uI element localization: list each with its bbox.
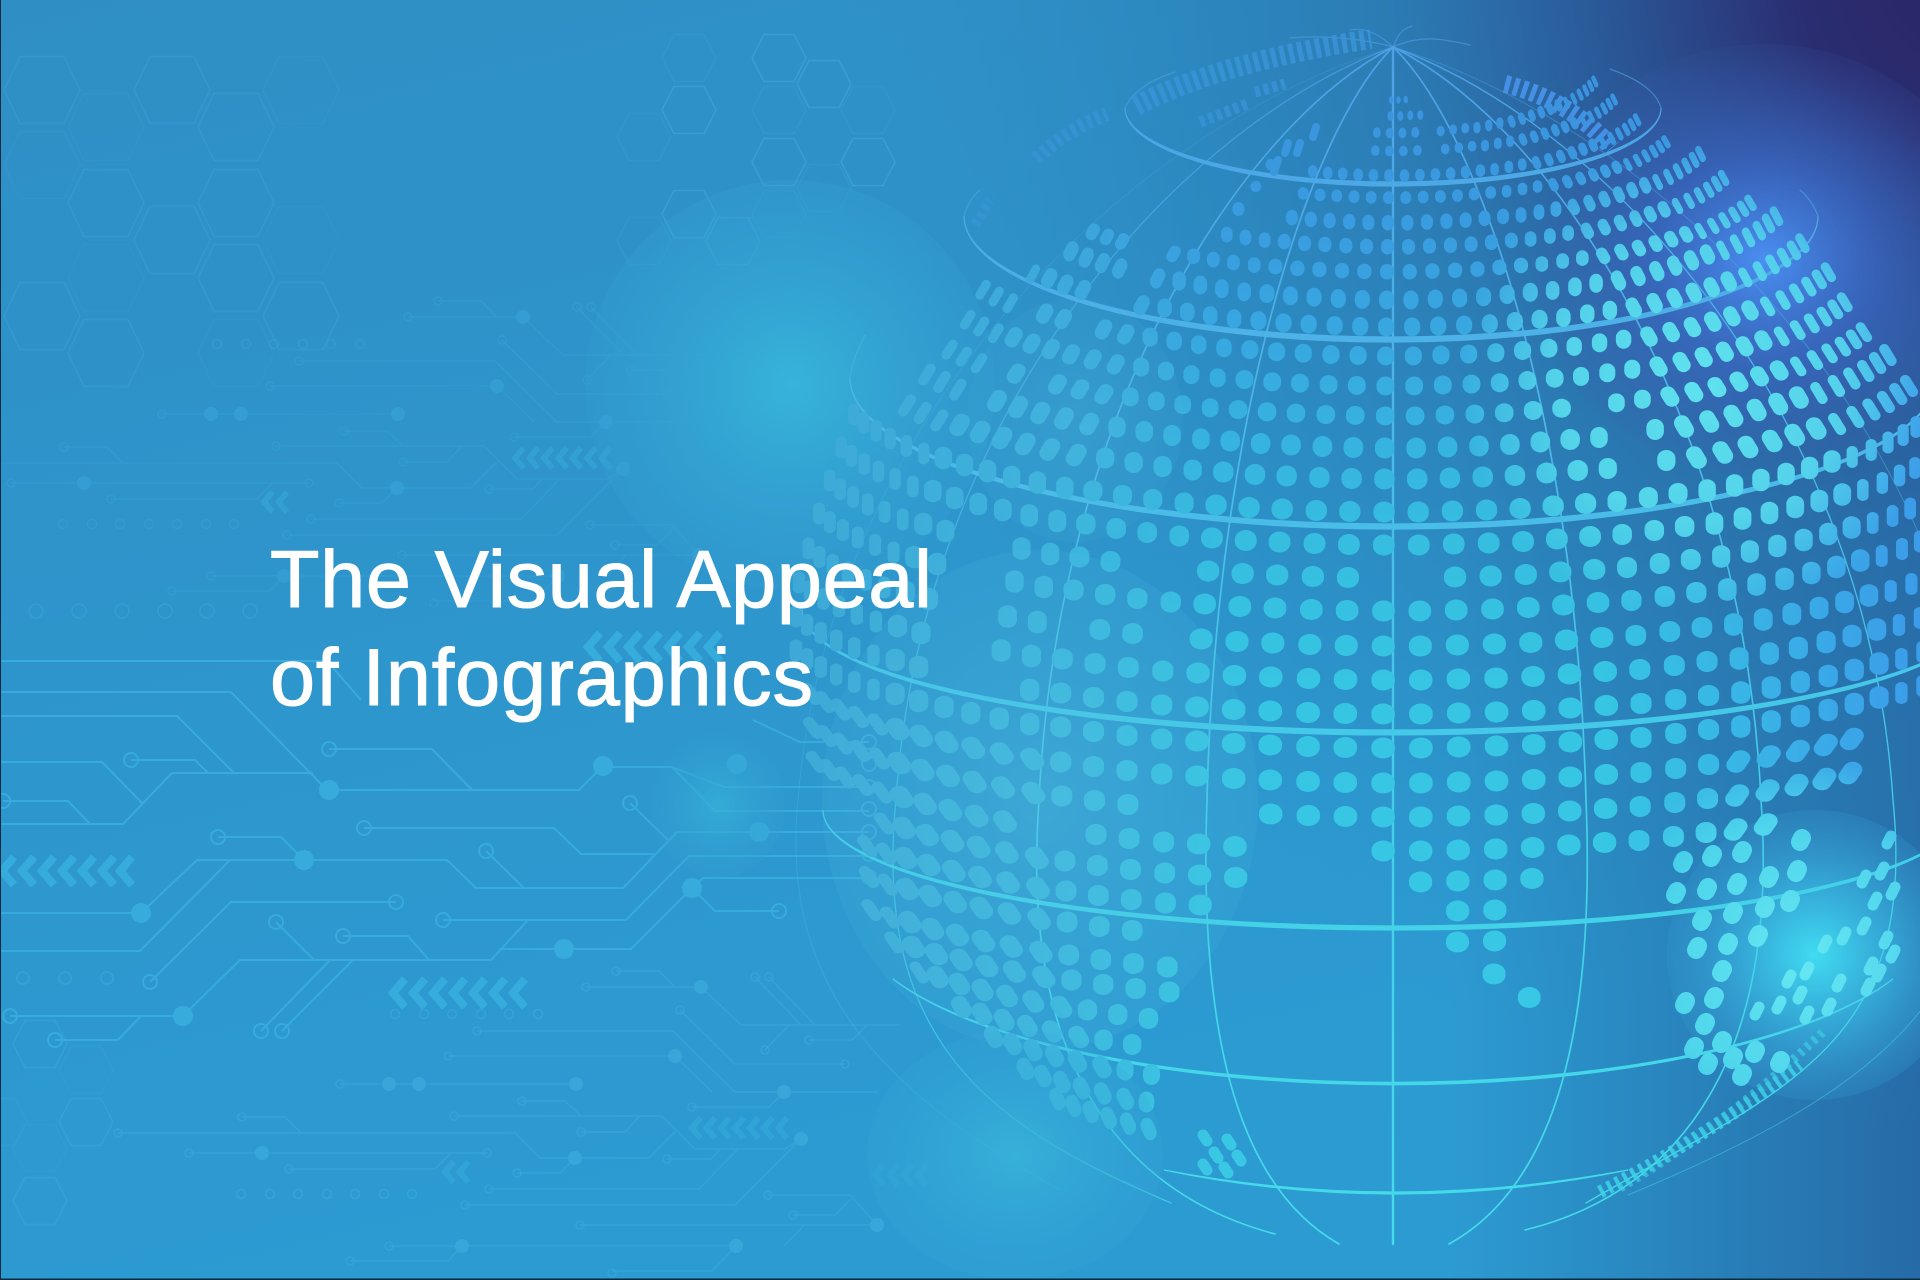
glow blob: bottom [867, 1030, 1163, 1280]
title: The Visual Appeal [270, 535, 932, 625]
upper dotted rings of small circles [29, 604, 257, 618]
faint circuit traces, upper [0, 297, 722, 607]
globe meridian lines [796, 26, 1920, 1244]
globe dotted world map [790, 75, 1920, 1178]
glow veil: upper left of globe [967, 298, 1183, 542]
hexagon pattern, upper left [4, 56, 339, 386]
glow blob: upper right blue [1533, 44, 1920, 476]
globe latitude rings [802, 108, 1920, 1194]
glow blob: small centre [650, 733, 786, 877]
polar tick marks on globe [975, 39, 1612, 225]
strong circuit traces [0, 661, 876, 1047]
lower right tick marks on globe [1600, 1030, 1825, 1192]
glow veil: globe left [822, 550, 1258, 1050]
chevron arrows [2, 448, 927, 1185]
title [270, 535, 932, 723]
hexagon pattern, lower left [0, 1020, 113, 1224]
title: of Infographics [270, 633, 813, 723]
glow blob: lower right cyan [1667, 810, 1920, 1100]
glow blob: upper centre [585, 180, 995, 590]
hexagon pattern, top centre [617, 34, 895, 264]
faint circuit traces, lower [114, 967, 900, 1277]
